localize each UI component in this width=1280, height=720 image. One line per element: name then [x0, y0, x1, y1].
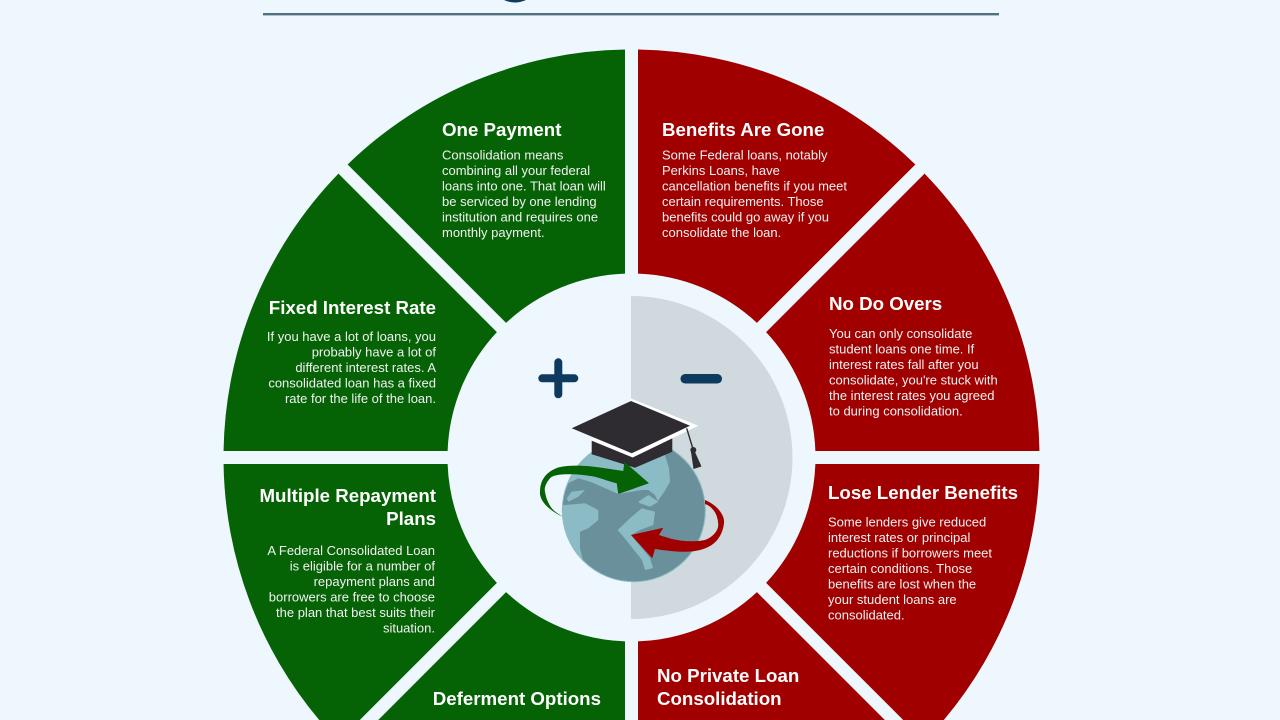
- panel: No Private Loan Consolidation: Consolidation: [657, 688, 782, 709]
- panel: Multiple Repayment Plans: [224, 464, 497, 720]
- panel: Multiple Repayment Plans: the plan that best suits their: [276, 605, 436, 620]
- panel: Multiple Repayment Plans: borrowers are free to choose: [269, 590, 435, 604]
- panel: Multiple Repayment Plans: A Federal Consolidated Loan: [267, 543, 435, 558]
- panel: Multiple Repayment Plans: repayment plans and: [314, 574, 435, 589]
- panel: No Do Overs: to during consolidation.: [829, 404, 963, 418]
- panel: One Payment: combining all your federal: [442, 163, 590, 178]
- panel: No Do Overs: interest rates fall after you: [829, 357, 979, 372]
- panel: One Payment: be serviced by one lending: [442, 194, 597, 209]
- panel: Fixed Interest Rate: Fixed Interest Rate: [269, 297, 436, 318]
- panel: Multiple Repayment Plans: situation.: [383, 620, 435, 636]
- panel: No Do Overs: the interest rates you agreed: [829, 388, 994, 403]
- title remnant: [504, 0, 526, 2]
- panel: No Private Loan Consolidation: [638, 592, 885, 720]
- panel: Deferment Options: Deferment Options: [433, 688, 601, 709]
- panel: Fixed Interest Rate: consolidated loan has a fixed: [268, 376, 436, 390]
- panel: One Payment: institution and requires one: [442, 210, 598, 224]
- panel: No Do Overs: No Do Overs: [829, 293, 942, 314]
- panel: No Private Loan Consolidation: No Private Loan: [657, 665, 799, 686]
- panel: Benefits Are Gone: cancellation benefits if you meet: [662, 178, 847, 194]
- panel: One Payment: Consolidation means: [442, 148, 564, 162]
- panel: Fixed Interest Rate: If you have a lot of loans, you: [267, 329, 436, 344]
- panel: Multiple Repayment Plans: Plans: [386, 508, 436, 529]
- panel: Benefits Are Gone: Benefits Are Gone: [662, 119, 824, 140]
- panel: No Do Overs: You can only consolidate: [829, 326, 972, 341]
- panel: Benefits Are Gone: consolidate the loan.: [662, 225, 781, 240]
- panel: Lose Lender Benefits: Some lenders give reduced: [828, 514, 986, 530]
- panel: Lose Lender Benefits: [766, 464, 1039, 720]
- panel: Lose Lender Benefits: consolidated.: [828, 608, 905, 622]
- panel: One Payment: loans into one. That loan will: [442, 178, 606, 194]
- center grey half circle: [631, 296, 792, 619]
- panel: No Do Overs: consolidate, you're stuck with: [829, 372, 998, 388]
- panel: One Payment: One Payment: [442, 119, 561, 140]
- panel: Benefits Are Gone: certain requirements. Those: [662, 194, 824, 209]
- icon: plus: [542, 362, 574, 394]
- panel: No Do Overs: student loans one time. If: [829, 342, 975, 356]
- panel: Fixed Interest Rate: probably have a lot of: [312, 344, 436, 360]
- icon: minus: [680, 374, 722, 384]
- arrow: green: [540, 462, 649, 517]
- mortarboard base: [592, 425, 672, 468]
- panel: Benefits Are Gone: Some Federal loans, notably: [662, 148, 828, 162]
- panel: Fixed Interest Rate: rate for the life of the loan.: [285, 391, 436, 406]
- panel: Benefits Are Gone: benefits could go away if you: [662, 210, 829, 224]
- tassel: [687, 428, 693, 450]
- panel: Benefits Are Gone: Perkins Loans, have: [662, 163, 780, 178]
- panel: Multiple Repayment Plans: Multiple Repayment: [259, 485, 436, 506]
- mortarboard top: [590, 398, 698, 458]
- title underline: [263, 13, 999, 15]
- panel: Fixed Interest Rate: different interest rates. A: [295, 360, 436, 375]
- panel: Benefits Are Gone: [638, 50, 915, 323]
- icon: globe with cap and arrows: [540, 398, 724, 582]
- panel: Deferment Options: [378, 592, 625, 720]
- panel: No Do Overs: [766, 174, 1039, 451]
- panel: Fixed Interest Rate: [224, 174, 497, 451]
- panel: Lose Lender Benefits: interest rates or principal: [828, 530, 970, 545]
- panel: One Payment: [348, 50, 625, 323]
- panel: Lose Lender Benefits: reductions if borrowers meet: [828, 546, 992, 560]
- panel: Lose Lender Benefits: certain conditions. Those: [828, 561, 972, 576]
- panel: Lose Lender Benefits: your student loans are: [828, 592, 957, 607]
- arrow: red: [631, 500, 724, 558]
- panel: Multiple Repayment Plans: is eligible for a number of: [290, 558, 435, 574]
- panel: One Payment: monthly payment.: [442, 225, 545, 240]
- panel: Lose Lender Benefits: benefits are lost when the: [828, 576, 976, 592]
- panel: Lose Lender Benefits: Lose Lender Benefits: [828, 482, 1018, 503]
